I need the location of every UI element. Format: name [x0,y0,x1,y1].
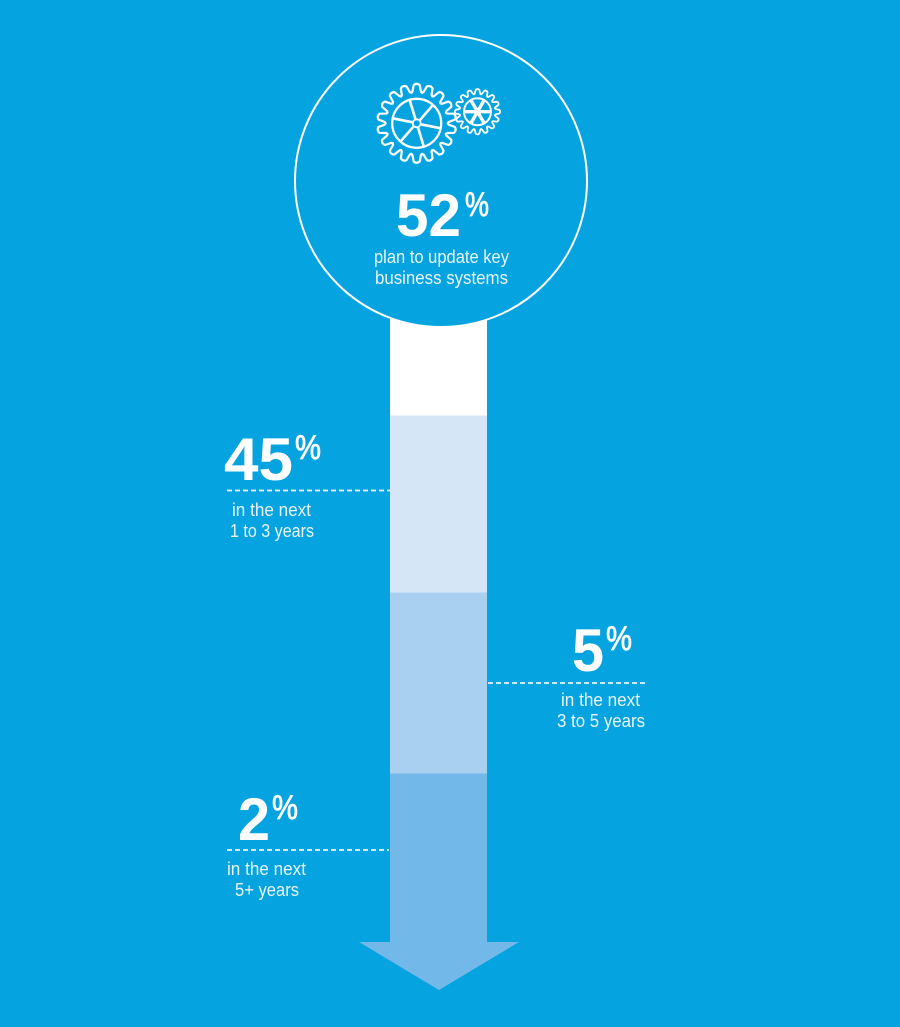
segment: 45% 1 to 3 years [390,416,487,592]
callout: 5% in the next 3 to 5 years [488,617,645,731]
stat: 5%: 5 [572,617,604,684]
text: in the next 5+ years: 5+ years [235,879,299,900]
segment: 5% 3 to 5 years [390,592,487,774]
icon: small gear [455,89,500,134]
text: plan to update key business systems: business systems [375,267,508,288]
text: in the next 3 to 5 years: 3 to 5 years [557,710,645,731]
stat: 45%: % [295,429,321,467]
callout: 2% in the next 5+ years [227,786,389,900]
stat: 2% [238,786,298,853]
stat: 5%: % [606,620,632,658]
stat: 2%: % [272,789,298,827]
text: in the next 5+ years [227,858,306,900]
icon: large gear [377,84,457,163]
stat: 52%: 52 [396,182,461,249]
text: plan to update key business systems: plan to update key [374,246,510,267]
stat: 45%: 45 [224,426,293,493]
stat: 45% [224,426,321,493]
stat: 2%: 2 [238,786,270,853]
headline circle [295,35,587,327]
text: in the next 1 to 3 years [230,499,314,541]
stat: 5% [572,617,632,684]
circle outline [295,35,587,327]
text: in the next 1 to 3 years: 1 to 3 years [230,520,314,541]
arrow column [359,300,519,990]
text: in the next 3 to 5 years [557,689,645,731]
segment: 52% white [390,300,487,416]
text: in the next 1 to 3 years: in the next [232,499,311,520]
text: plan to update key business systems [374,246,510,288]
segment: 2% 5+ years with arrowhead [359,774,519,990]
callout: 45% in the next 1 to 3 years [224,426,390,541]
stat: 52%: % [465,186,489,224]
text: in the next 5+ years: in the next [227,858,306,879]
text: in the next 3 to 5 years: in the next [561,689,640,710]
